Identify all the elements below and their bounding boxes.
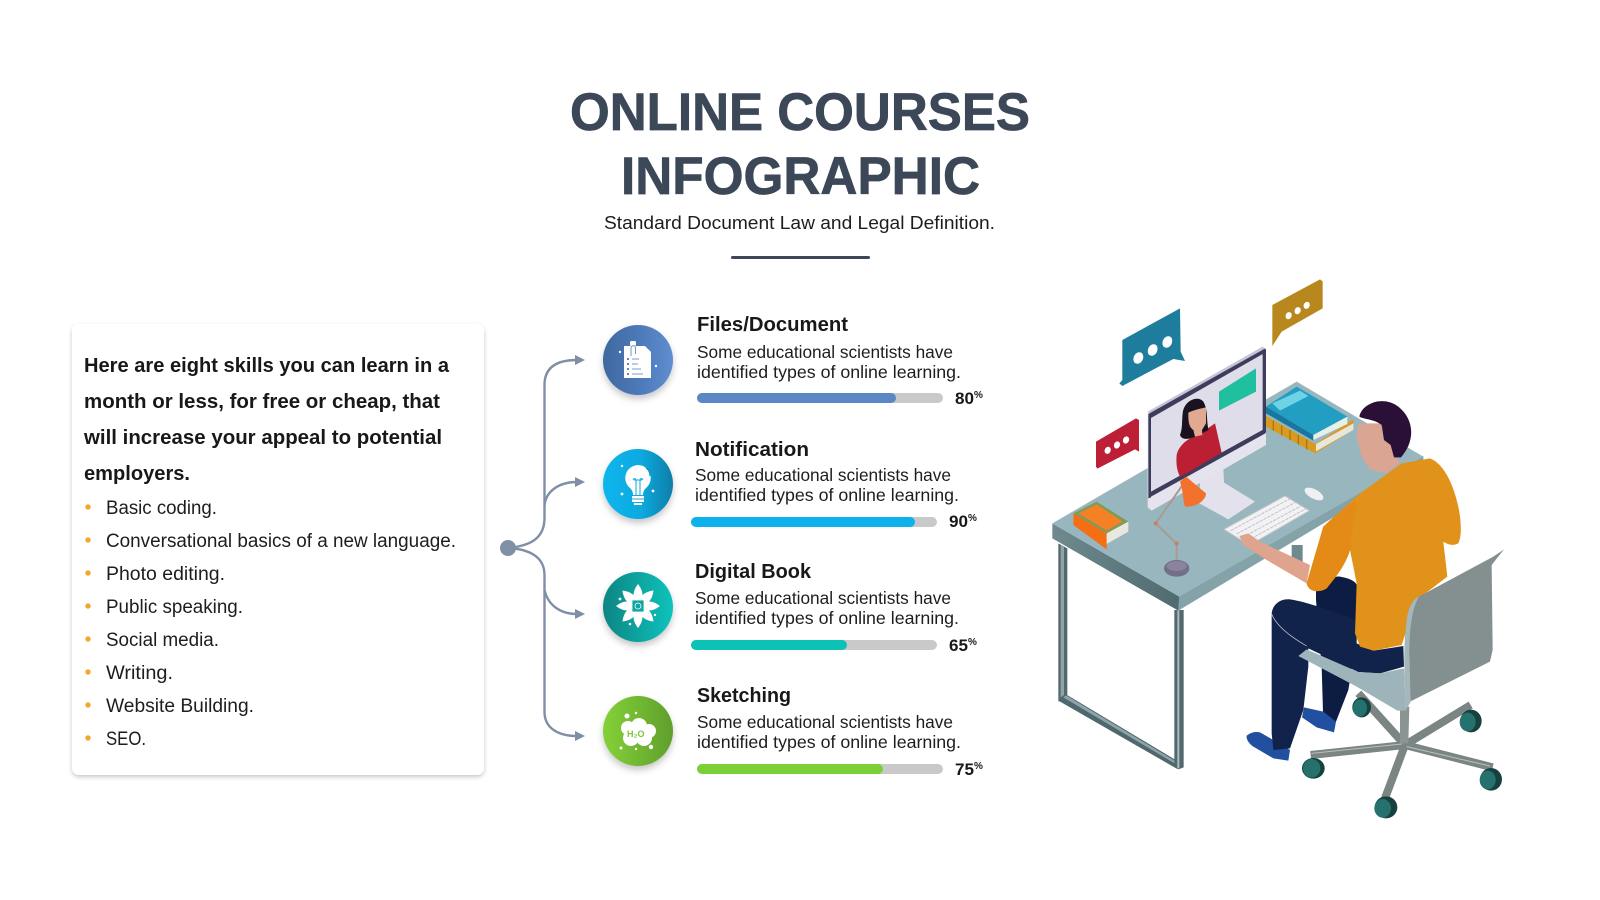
mouse	[1303, 485, 1325, 503]
title	[570, 83, 1030, 206]
value	[949, 636, 977, 655]
rear leg	[1316, 576, 1357, 723]
description: Some educational scientists have	[695, 465, 951, 485]
illustration: person at desk	[1052, 279, 1504, 818]
description: Some educational scientists have	[697, 342, 953, 362]
item: Digital Book	[603, 561, 977, 655]
sweater	[1307, 458, 1461, 651]
description: Some educational scientists have	[695, 588, 951, 608]
subtitle: Standard Document Law and Legal Definition.	[604, 213, 995, 233]
bullet list: Public speaking.	[106, 597, 243, 618]
speech bubble: gold	[1272, 279, 1323, 346]
bullet list: Social media.	[106, 630, 219, 651]
keyboard	[1224, 496, 1309, 545]
description: identified types of online learning.	[695, 608, 959, 628]
bullet list: Website Building.	[106, 696, 254, 717]
value: %	[968, 513, 977, 524]
shoes	[1302, 707, 1336, 732]
panel heading: will increase your appeal to potential	[83, 426, 442, 449]
progress bar 90%	[691, 517, 937, 527]
speech bubble: teal	[1119, 308, 1185, 386]
value	[955, 389, 983, 408]
title: ONLINE COURSES	[570, 83, 1030, 142]
lamp	[1154, 477, 1206, 577]
icon: light bulb	[603, 449, 673, 519]
label: Notification	[695, 439, 809, 461]
value	[955, 760, 983, 779]
bullet list: SEO.	[106, 729, 146, 750]
icon: flower	[603, 572, 673, 642]
desk	[1052, 382, 1423, 769]
value: %	[974, 390, 983, 401]
chair base	[1302, 693, 1502, 818]
description: identified types of online learning.	[695, 485, 959, 505]
value: 75	[955, 760, 974, 779]
book on desk corner	[1073, 502, 1128, 549]
bullet list	[85, 498, 456, 750]
value: %	[974, 761, 983, 772]
bullet list: Basic coding.	[106, 498, 217, 519]
value: 90	[949, 512, 968, 531]
description	[697, 342, 961, 382]
front leg and thigh	[1272, 599, 1404, 750]
panel heading	[83, 354, 450, 485]
arm	[1239, 533, 1310, 583]
neck and face	[1357, 423, 1400, 473]
on-screen teacher	[1176, 399, 1222, 477]
description	[695, 588, 959, 628]
label: Digital Book	[695, 561, 812, 583]
bullet list: Conversational basics of a new language.	[106, 531, 456, 552]
panel heading: month or less, for free or cheap, that	[84, 390, 440, 413]
title: INFOGRAPHIC	[621, 147, 980, 206]
value	[949, 512, 977, 531]
progress bar 65%	[691, 640, 937, 650]
value: 80	[955, 389, 974, 408]
books	[1266, 387, 1353, 453]
description: identified types of online learning.	[697, 362, 961, 382]
panel: skills list	[72, 324, 484, 775]
icon: cloud	[603, 696, 673, 766]
panel heading: employers.	[84, 462, 190, 485]
panel heading: Here are eight skills you can learn in a	[84, 354, 450, 377]
label: Sketching	[697, 685, 791, 707]
connector tree arrows	[500, 355, 585, 741]
bullet list: Writing.	[106, 663, 173, 684]
monitor	[1148, 347, 1266, 519]
progress bar 75%	[697, 764, 943, 774]
label: Files/Document	[697, 314, 848, 336]
speech bubble: red	[1096, 418, 1139, 469]
icon: cloud: H₂O	[627, 729, 644, 739]
item: Files/Document	[603, 314, 983, 408]
description	[697, 712, 961, 752]
value: 65	[949, 636, 968, 655]
description: Some educational scientists have	[697, 712, 953, 732]
progress bar 80%	[697, 393, 943, 403]
icon: document	[603, 325, 673, 395]
value: %	[968, 637, 977, 648]
chair seat and back	[1298, 549, 1504, 711]
person	[1239, 401, 1461, 761]
item: Sketching	[603, 685, 983, 779]
description: identified types of online learning.	[697, 732, 961, 752]
description	[695, 465, 959, 505]
item: Notification	[603, 439, 977, 531]
bullet list: Photo editing.	[106, 564, 225, 585]
hair	[1359, 401, 1411, 457]
